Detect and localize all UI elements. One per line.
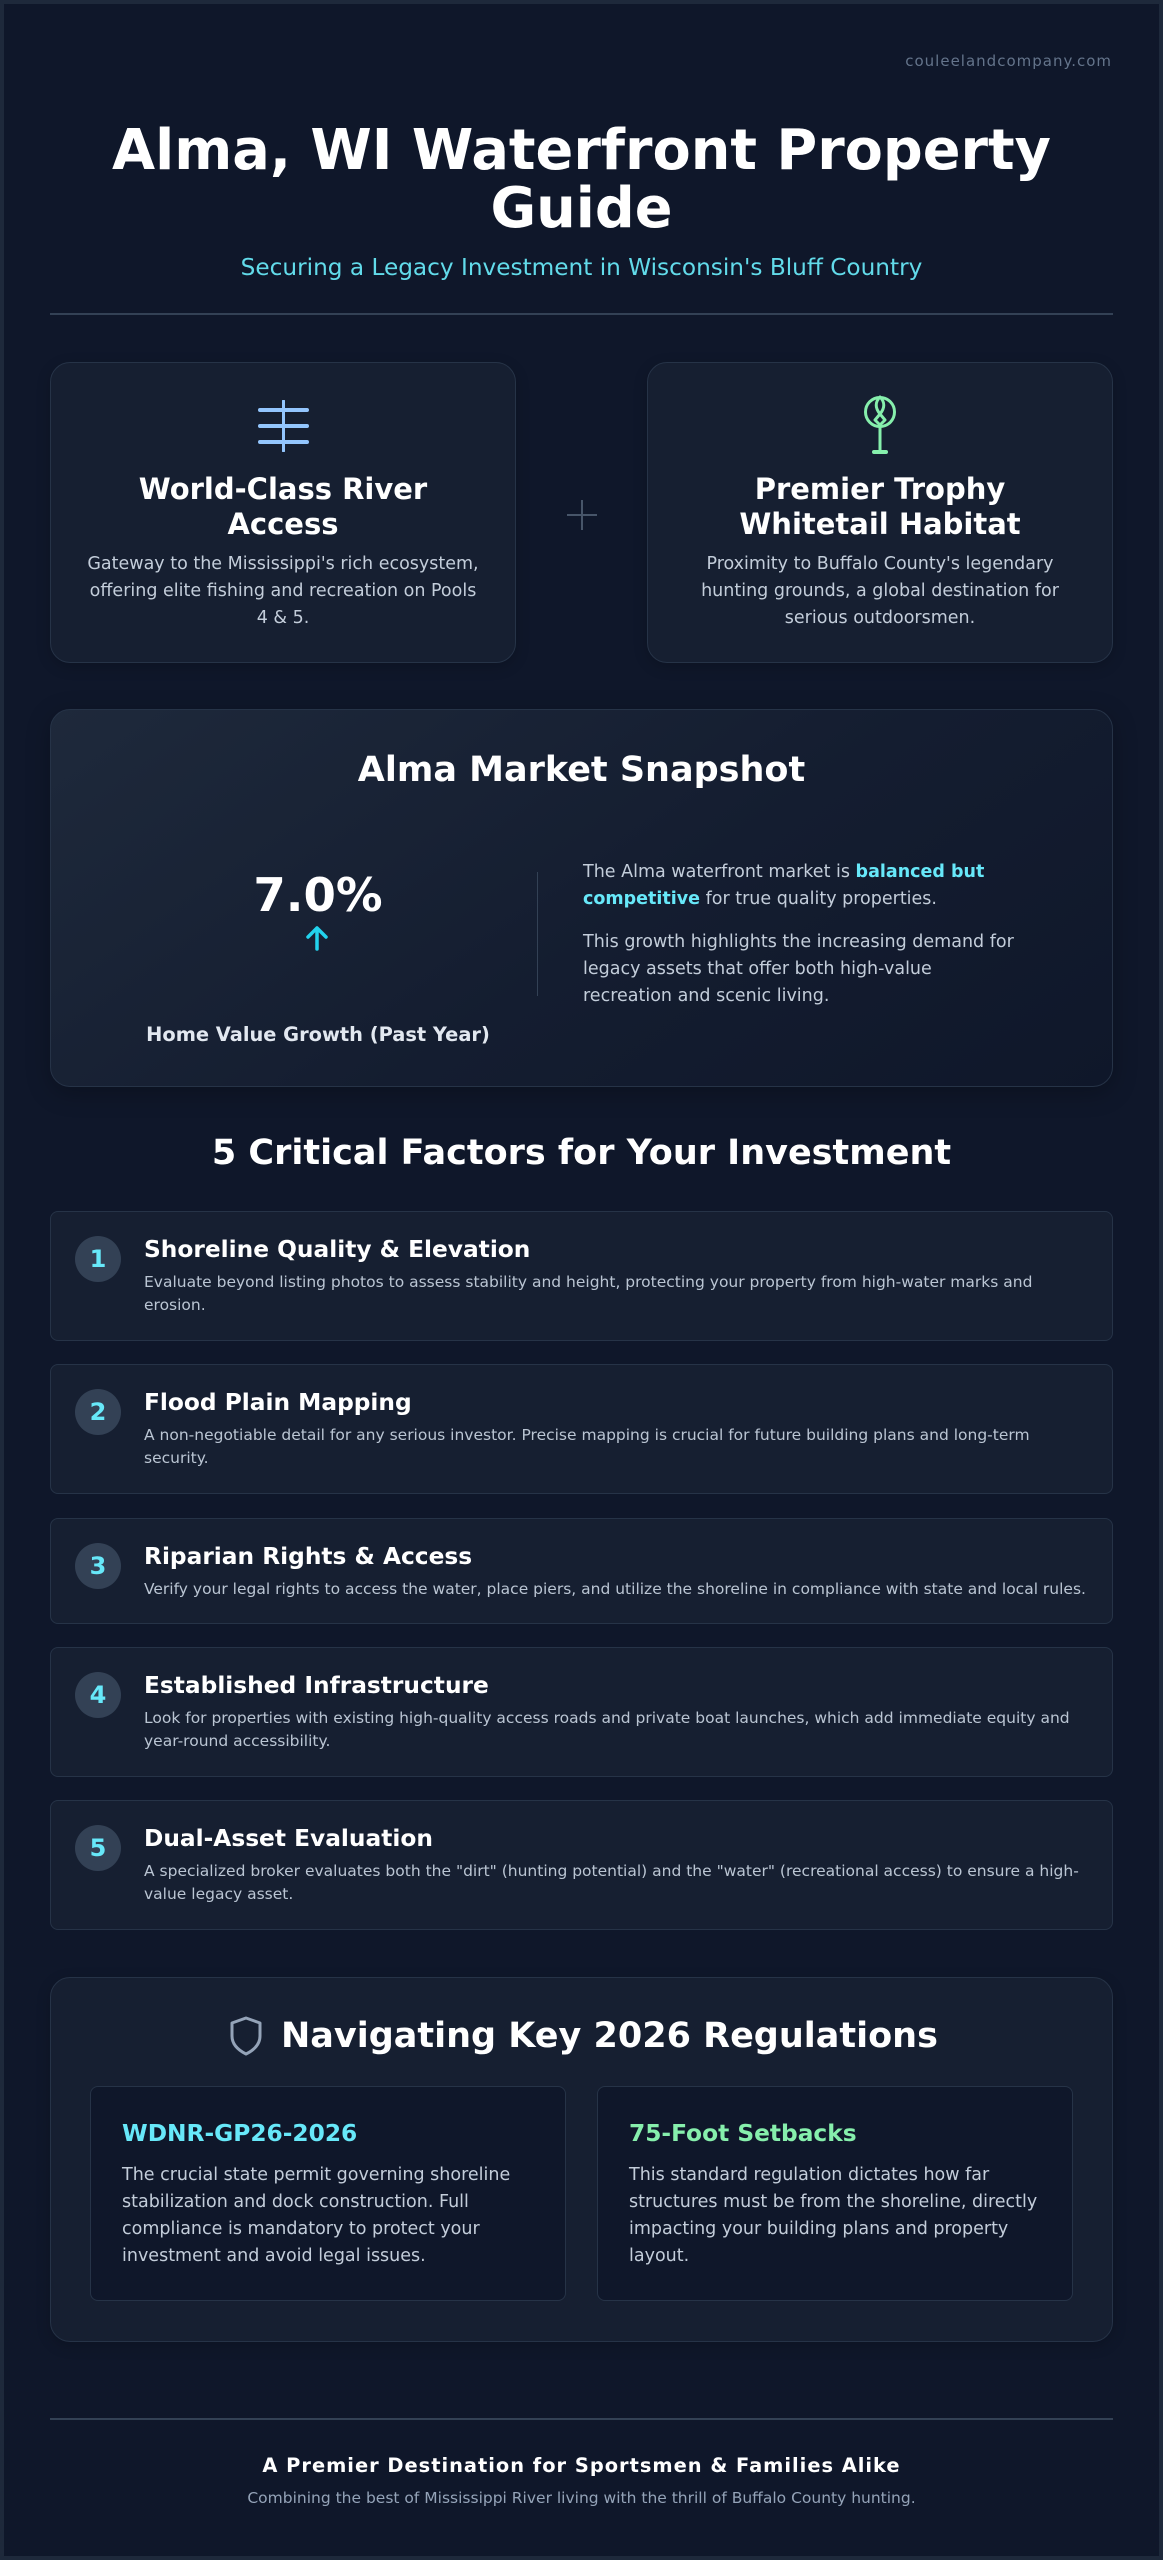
panel: market snapshot [50, 709, 1113, 1087]
heading: critical factors: 5 Critical Factors for Your Investment [212, 1133, 951, 1173]
number 3 [75, 1543, 121, 1589]
number 5 [75, 1825, 121, 1871]
text: whitetail habitat: Proximity to Buffalo County's legendary [706, 554, 1054, 574]
header divider [50, 313, 1113, 315]
factor 1 text: Evaluate beyond listing photos to assess stability and height, protecting your property from high-water marks and erosion. [144, 1273, 1032, 1314]
text: whitetail habitat: serious outdoorsmen. [785, 608, 975, 628]
text: market analysis: competitive for true quality properties. [583, 889, 937, 909]
factor 2 [50, 1364, 1113, 1494]
text: river access: Gateway to the Mississippi's rich ecosystem, [87, 554, 479, 574]
text: market analysis [582, 862, 1014, 1006]
regulation card: setbacks [597, 2086, 1073, 2301]
panel: river access [50, 362, 516, 663]
heading: whitetail habitat: Whitetail Habitat [739, 507, 1021, 541]
text: market analysis: The Alma waterfront market is balanced but [583, 862, 984, 882]
text: market analysis: This growth highlights the increasing demand for [583, 932, 1014, 952]
text: river access: 4 & 5. [257, 608, 309, 628]
footer divider [50, 2418, 1113, 2420]
factor 3 [50, 1518, 1113, 1624]
number 3: 3 [90, 1552, 106, 1580]
icon: plus connector [567, 500, 597, 530]
title: Alma, WI Waterfront Property Guide [112, 118, 1051, 241]
factor 4 [50, 1647, 1113, 1777]
factor 1 [50, 1211, 1113, 1341]
number 4 [75, 1672, 121, 1718]
heading: river access: World-Class River [139, 472, 427, 506]
footer text: Combining the best of Mississippi River living with the thrill of Buffalo County hunting. [247, 2489, 916, 2507]
permit title: WDNR-GP26-2026 [122, 2120, 357, 2147]
number 1 [75, 1236, 121, 1282]
text: whitetail habitat [701, 554, 1059, 628]
text: whitetail habitat: hunting grounds, a global destination for [701, 581, 1059, 601]
subtitle: Securing a Legacy Investment in Wisconsin's Bluff Country [241, 254, 922, 281]
divider [537, 872, 538, 996]
factor 4 text: Look for properties with existing high-quality access roads and private boat launches, which add immediate equity and year-round accessibility. [144, 1709, 1070, 1750]
setbacks title: 75-Foot Setbacks [629, 2120, 857, 2147]
number 5: 5 [90, 1834, 106, 1862]
factor 3 text: Verify your legal rights to access the water, place piers, and utilize the shoreline in compliance with state and local rules. [144, 1580, 1086, 1598]
heading: market snapshot: Alma Market Snapshot [358, 750, 805, 790]
text: market analysis: legacy assets that offer both high-value [583, 959, 932, 979]
text: river access [87, 554, 479, 628]
panel: regulations [50, 1977, 1113, 2342]
factor 2 title: Flood Plain Mapping [144, 1389, 412, 1416]
text: river access: offering elite fishing and recreation on Pools [90, 581, 476, 601]
permit text: The crucial state permit governing shoreline stabilization and dock construction. Full compliance is mandatory to protect your investment and avoid legal issues. [122, 2165, 510, 2266]
footer headline: A Premier Destination for Sportsmen & Families Alike [262, 2454, 901, 2477]
icon: trophy antlers [864, 395, 896, 454]
heading: whitetail habitat [739, 472, 1021, 541]
stat: home value growth: 7.0% [253, 868, 383, 922]
panel: whitetail habitat [647, 362, 1113, 663]
heading: river access: Access [227, 507, 338, 541]
text: market analysis: recreation and scenic living. [583, 986, 829, 1006]
number 1: 1 [90, 1245, 106, 1273]
factor 1 title: Shoreline Quality & Elevation [144, 1236, 530, 1263]
source url: couleelandcompany.com [905, 52, 1112, 70]
regulation card: WDNR permit [90, 2086, 566, 2301]
factor 5 text: A specialized broker evaluates both the "dirt" (hunting potential) and the "water" (recreational access) to ensure a high-value legacy asset. [144, 1862, 1079, 1903]
factor 3 title: Riparian Rights & Access [144, 1543, 472, 1570]
number 2 [75, 1389, 121, 1435]
number 4: 4 [90, 1681, 106, 1709]
factor 4 title: Established Infrastructure [144, 1672, 489, 1699]
factor 5 [50, 1800, 1113, 1930]
heading: regulations: Navigating Key 2026 Regulations [281, 2016, 938, 2056]
heading: river access [139, 472, 428, 541]
setbacks text: This standard regulation dictates how far structures must be from the shoreline, directly impacting your building plans and property layout. [629, 2165, 1037, 2266]
icon: river lines [258, 400, 309, 452]
number 2: 2 [90, 1398, 106, 1426]
icon: shield [230, 2016, 262, 2056]
factor 2 text: A non-negotiable detail for any serious investor. Precise mapping is crucial for future building plans and long-term security. [144, 1426, 1030, 1467]
icon: up arrow [306, 926, 328, 951]
label: home value growth: Home Value Growth (Past Year) [146, 1023, 490, 1046]
heading: whitetail habitat: Premier Trophy [755, 472, 1005, 506]
factor 5 title: Dual-Asset Evaluation [144, 1825, 433, 1852]
